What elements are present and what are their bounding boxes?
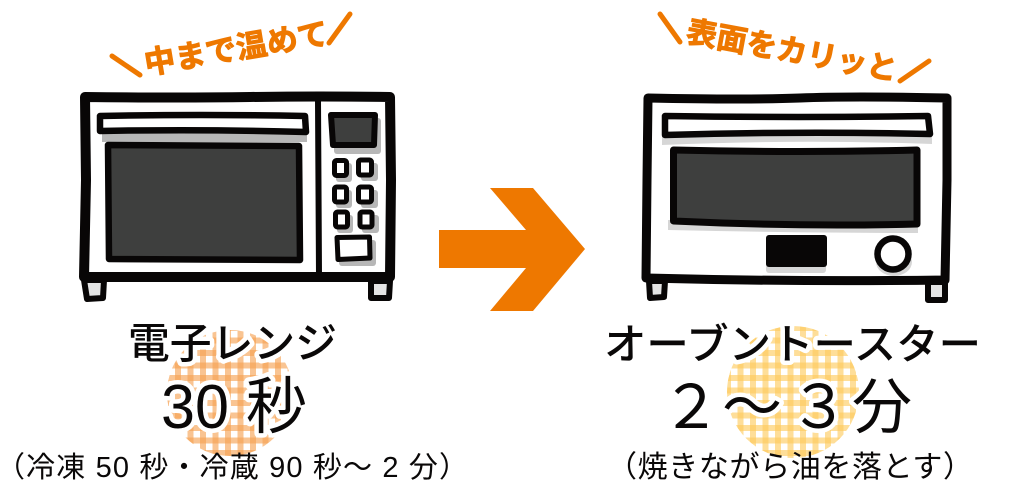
microwave display <box>331 115 375 145</box>
toaster handle shadow <box>662 130 932 145</box>
time: toaster: ２～３分 <box>661 374 912 441</box>
callout slash right <box>329 14 350 43</box>
microwave buttons <box>334 160 379 266</box>
microwave handle <box>100 115 306 132</box>
callout text: 表面をカリッと <box>684 15 900 87</box>
toaster feet <box>649 281 945 300</box>
note: toaster: （焼きながら油を落とす） <box>607 451 973 484</box>
microwave window <box>108 145 300 260</box>
toaster knob <box>878 238 908 270</box>
toaster handle <box>665 116 930 135</box>
toaster body <box>646 97 947 281</box>
toaster window <box>674 150 917 225</box>
gingham circle: toaster time <box>727 326 859 458</box>
label: toaster name: オーブントースター <box>604 321 981 368</box>
microwave body <box>84 96 391 277</box>
toaster window shadow <box>668 220 918 233</box>
note: microwave: （冷凍 50 秒・冷蔵 90 秒～ 2 分） <box>0 451 468 484</box>
microwave feet <box>84 280 390 299</box>
time: microwave: 30 秒 <box>161 373 307 442</box>
microwave handle shadow <box>102 125 307 142</box>
microwave illustration <box>84 96 391 299</box>
microwave divider <box>318 100 319 276</box>
label: microwave name: 電子レンジ <box>128 320 337 367</box>
toaster knob shadow <box>876 248 912 276</box>
toaster control panel <box>766 235 827 267</box>
callout: microwave <box>112 14 350 81</box>
microwave display shadow <box>334 118 381 154</box>
callout text: 中まで温めて <box>142 16 331 81</box>
callout slash left <box>660 14 680 42</box>
callout slash left <box>112 56 140 75</box>
arrow <box>439 188 585 311</box>
toaster panel shadow <box>766 250 826 273</box>
callout slash right <box>900 61 929 81</box>
gingham circle: microwave time <box>167 330 293 456</box>
toaster illustration <box>646 97 947 300</box>
callout: toaster <box>660 14 929 87</box>
